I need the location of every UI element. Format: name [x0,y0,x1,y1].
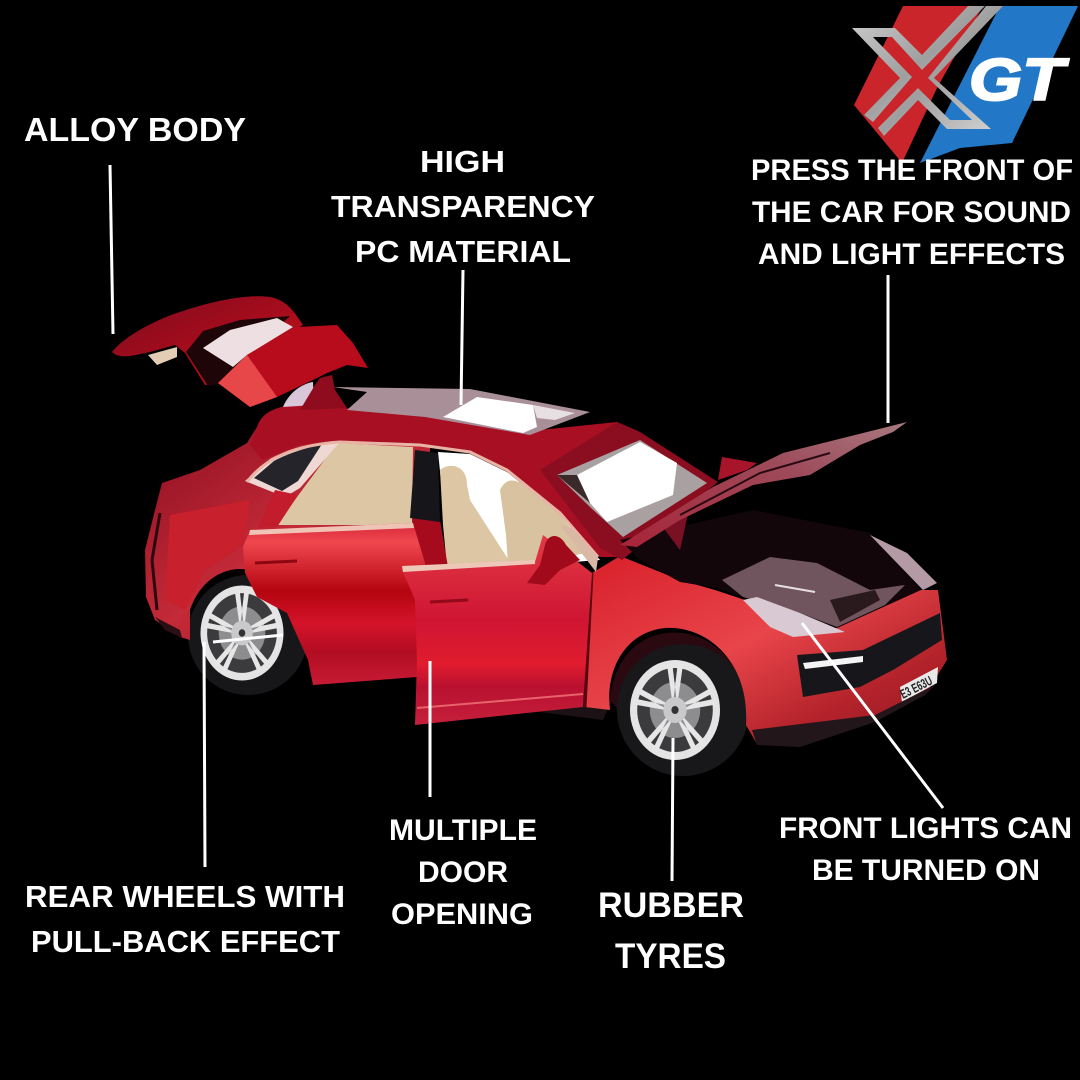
opened hood [620,422,907,547]
label: front lights can be turned on: BE TURNED ON [812,854,1040,887]
logo red panel [854,6,983,163]
label: alloy body [24,111,246,334]
engine cover [722,557,905,627]
bay red inner [665,505,690,550]
rear body [145,427,430,640]
label: alloy body: ALLOY BODY [24,111,246,148]
side window interior [277,443,413,525]
glass roof [283,382,590,435]
rear door [243,490,425,685]
tailgate window [203,318,293,367]
rear bumper dark strip [155,617,182,638]
underbody strip [540,700,612,720]
label: multiple door opening: DOOR [418,856,508,889]
label: rear wheels with pull-back effect: PULL-BACK EFFECT [31,924,340,959]
label: multiple door opening: OPENING [391,898,533,931]
rear quarter window [245,442,340,497]
logo: XGT [852,6,1078,163]
label: high transparency PC material: PC MATERIAL [355,234,571,269]
label: rubber tyres: TYRES [615,937,726,976]
label: high transparency PC material: HIGH [420,144,505,179]
rear wing door upper [112,296,303,385]
rear wheel [188,575,308,695]
window trim [247,442,598,557]
front body [585,556,947,746]
right headlight [870,535,937,590]
rear haunch highlight [165,500,250,610]
logo X mark [852,6,1003,136]
label: front lights can be turned on: FRONT LIGHTS CAN [779,812,1072,845]
label: sound and light effects: AND LIGHT EFFECTS [758,238,1065,271]
b-pillar lower red [412,518,448,568]
rear wing door lower [218,325,368,407]
front grille [797,613,942,697]
tail dark seam [152,513,160,610]
label: sound and light effects [751,154,1073,423]
label: rear wheels with pull-back effect [25,635,345,959]
label: high transparency PC material: TRANSPARENCY [331,189,595,224]
label: high transparency PC material [331,144,595,405]
label: multiple door opening: MULTIPLE [389,814,537,847]
windshield frame [540,422,718,560]
a pillar pale strip [560,525,598,572]
car illustration [112,296,947,776]
windshield glass [557,440,707,537]
fender seam [585,573,592,707]
label: front lights can be turned on [779,623,1072,887]
front wheel [610,632,749,776]
wing mirror [527,536,580,585]
tailgate dark interior [186,316,290,386]
front door [402,535,592,725]
label: rubber tyres [598,738,744,976]
roof band [250,405,640,557]
left headlight [743,597,845,637]
door pillar [410,450,440,522]
front side window [438,452,600,568]
label: sound and light effects: PRESS THE FRONT OF [751,154,1073,187]
lower front lip [752,685,935,747]
beige trim piece [148,347,177,365]
logo GT letters: GT [969,47,1070,113]
label: multiple door opening [389,661,537,931]
license plate: E3 E63U [898,673,935,702]
label: sound and light effects: THE CAR FOR SOUND [752,196,1071,229]
upper hinge of tailgate [300,375,347,410]
engine bay [620,510,921,628]
front seats [440,466,590,567]
logo blue panel [920,6,1078,163]
label: rear wheels with pull-back effect: REAR WHEELS WITH [25,879,345,914]
label: rubber tyres: RUBBER [598,886,744,925]
